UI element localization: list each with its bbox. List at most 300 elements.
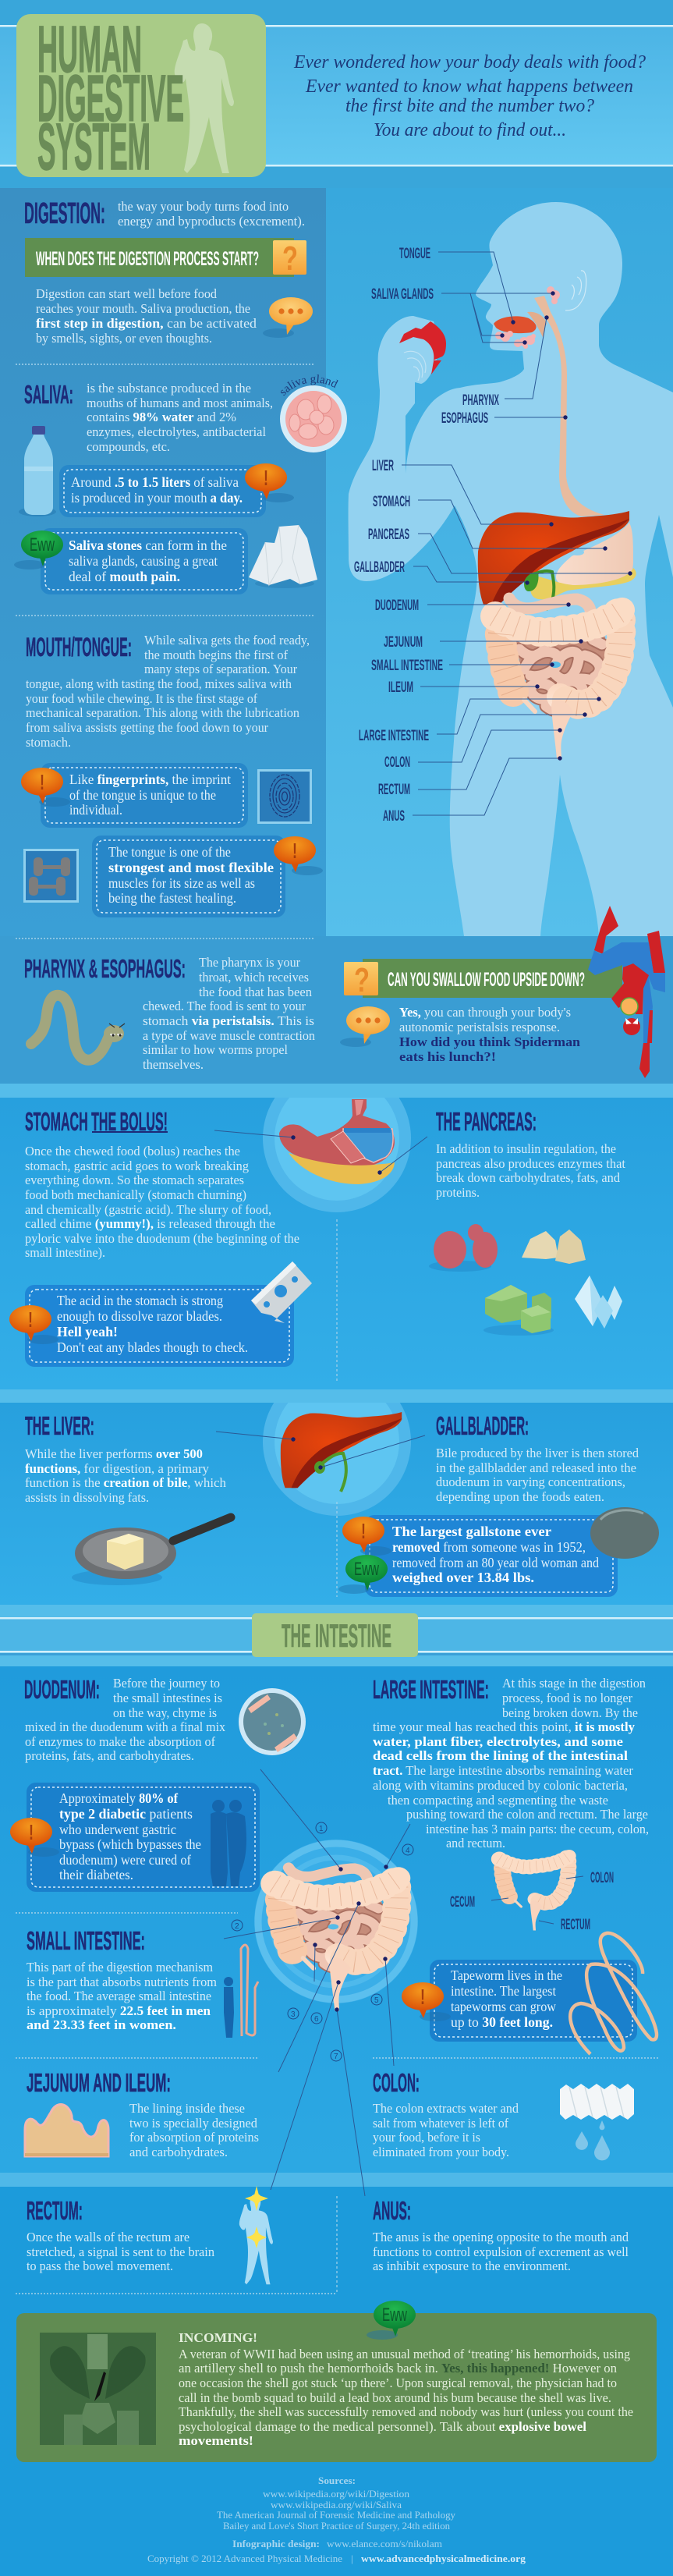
icon: saliva stone	[249, 525, 317, 588]
panel: gallbladder: GALLBLADDER:	[436, 1411, 529, 1440]
text block: incoming: A veteran of WWII had been using an unusual method of ‘treating’ his hemorrhoids, using	[179, 2347, 630, 2361]
callout: tongue strength	[92, 836, 323, 917]
callout: gastric bypass	[10, 1783, 260, 1892]
callout: saliva stones: Saliva stones can form in the	[69, 538, 227, 553]
icon: razor blade	[251, 1261, 312, 1323]
labels: ILEUM	[388, 679, 413, 696]
banner: the intestine	[0, 1613, 673, 1657]
text block: digestion start: by smells, sights, or even thoughts.	[36, 331, 212, 346]
icon: eww bubble: Eww	[354, 1559, 379, 1580]
icon: eww bubble	[14, 530, 63, 569]
text block: small intestine: is the part that absorbs nutrients from	[27, 1975, 217, 1989]
leader lines: liver	[216, 1432, 425, 1470]
icon: alert bubble	[21, 768, 70, 807]
number markers: 6	[314, 2015, 319, 2024]
panel: pancreas	[429, 1107, 625, 1336]
text block: swallow answer: How did you think Spiderman	[399, 1034, 581, 1049]
banner: when does digestion start: ?	[282, 240, 298, 278]
text block: large intestine: process, food is no longer	[502, 1691, 632, 1705]
icon: pelvis x-ray	[40, 2333, 156, 2445]
footer sources: Sources:	[318, 2475, 356, 2486]
text block: rectum: to pass the bowel movement.	[27, 2258, 173, 2273]
text block: stomach: pyloric valve into the duodenum (the beginning of the	[25, 1231, 299, 1246]
panel: intestine section: LARGE INTESTINE:	[373, 1675, 489, 1704]
callout: gallstone: removed from someone was in 1952,	[392, 1539, 586, 1555]
panel: intestine section	[10, 1675, 659, 2196]
text block: large intestine: then compacting and segmenting the waste	[388, 1793, 608, 1808]
icon: duodenum cross-section	[239, 1688, 306, 1755]
icon: alert bubble	[245, 463, 294, 502]
intro text: You are about to find out...	[374, 120, 566, 140]
icon: speech bubble	[340, 1006, 390, 1047]
callout: gallstone	[338, 1515, 618, 1597]
callout: tapeworm: Tapeworm lives in the	[451, 1967, 562, 1983]
text block: rectum: Once the walls of the rectum are	[27, 2230, 190, 2244]
icon: ice crystals	[575, 1276, 622, 1329]
icon: water bottle	[19, 426, 56, 516]
icon: alert bubble: !	[420, 1985, 425, 2009]
panel: intestine section: COLON:	[373, 2068, 420, 2097]
body silhouette	[349, 202, 673, 936]
organ: saliva glands	[495, 286, 560, 349]
icon: fat rocks	[522, 1229, 586, 1264]
callout: gastric bypass: their diabetes.	[59, 1867, 133, 1882]
text block: duodenum: of enzymes to make the absorption of	[25, 1734, 215, 1749]
callout: gastric bypass: who underwent gastric	[59, 1822, 176, 1837]
text block: pharynx	[143, 955, 315, 1072]
title block	[16, 12, 266, 183]
text block: pharynx: The pharynx is your	[199, 955, 300, 970]
text block: jejunum and ileum: for absorption of proteins	[129, 2130, 259, 2145]
text block: swallow answer	[399, 1005, 581, 1064]
footer sources: The American Journal of Forensic Medicine and Pathology	[217, 2509, 455, 2521]
labels: PANCREAS	[368, 527, 409, 543]
text block: liver: While the liver performs over 500	[25, 1446, 203, 1461]
organ: small intestine	[516, 634, 610, 713]
text block: liver	[25, 1446, 226, 1505]
footer sources: Copyright © 2012 Advanced Physical Medicine	[147, 2553, 342, 2564]
text block: incoming: INCOMING!	[179, 2330, 257, 2345]
text block: pancreas: pancreas also produces enzymes that	[436, 1156, 625, 1171]
panel: pancreas: THE PANCREAS:	[436, 1107, 537, 1136]
title block: DIGESTIVE	[37, 62, 184, 135]
panel: intestine section: SMALL INTESTINE:	[27, 1926, 145, 1955]
text block: stomach: small intestine).	[25, 1245, 105, 1260]
icon: saliva gland	[280, 374, 347, 452]
ring behind liver	[263, 1403, 411, 1516]
icon: speech bubble	[263, 297, 313, 338]
organ: gallbladder	[524, 571, 554, 610]
ring behind intestine	[254, 1840, 418, 2003]
labels: JEJUNUM	[384, 634, 423, 651]
text block: stomach: food both mechanically (stomach churning)	[25, 1187, 246, 1202]
labels: GALLBADDER	[354, 559, 405, 576]
text block: mouth	[26, 633, 310, 750]
text block: digestion start: Digestion can start well before food	[36, 286, 217, 301]
text block: anus: functions to control expulsion of excrement as well	[373, 2244, 629, 2259]
labels: COLON	[384, 754, 410, 771]
icon: eww bubble	[338, 1555, 388, 1594]
icon: alert bubble: !	[40, 770, 44, 794]
text block: digestion definition: energy and byproducts (excrement).	[118, 214, 305, 229]
callout: razor blades: Hell yeah!	[57, 1324, 118, 1339]
icon: protein blobs	[429, 1224, 498, 1272]
callout: tapeworm: up to 30 feet long.	[451, 2014, 553, 2030]
text block: colon: salt from whatever is left of	[373, 2116, 508, 2131]
text block: pharynx: throat, which receives	[199, 970, 309, 985]
callout: tapeworm	[402, 1960, 637, 2042]
text block: gallbladder	[436, 1446, 639, 1504]
organ: duodenum	[509, 598, 590, 610]
text block: pancreas	[436, 1141, 625, 1200]
number markers: 5	[374, 1996, 379, 2005]
banner: the intestine: THE INTESTINE	[282, 1617, 391, 1654]
text block: incoming: an artillery shell to push the hemorrhoids back in. Yes, this happened! However on	[179, 2361, 617, 2376]
text block: mouth: many steps of separation. Your	[144, 662, 297, 676]
number markers: 7	[334, 2053, 338, 2061]
icon: person beside intestine length	[224, 1945, 258, 2038]
icon: frying pan with butter	[72, 1517, 231, 1585]
callout: saliva quantity: is produced in your mouth a day.	[71, 490, 243, 506]
text block: saliva: contains 98% water and 2%	[87, 410, 236, 424]
labels: SMALL INTESTINE	[371, 658, 443, 674]
banner: when does digestion start: WHEN DOES THE DIGESTION PROCESS START?	[36, 248, 259, 270]
text block: large intestine: At this stage in the digestion	[502, 1676, 646, 1691]
text block: rectum: stretched, a signal is sent to the brain	[27, 2244, 214, 2259]
footer sources: www.advancedphysicalmedicine.org	[361, 2553, 526, 2564]
callout: gastric bypass: type 2 diabetic patients	[59, 1806, 193, 1822]
panel: intestine section: DUODENUM:	[24, 1675, 100, 1704]
text block: mouth: stomach.	[26, 735, 71, 750]
number markers: 4	[406, 1847, 410, 1855]
panel: mouth and tongue: MOUTH/TONGUE:	[26, 633, 132, 662]
icon: alert bubble: !	[292, 839, 297, 863]
callout: tongue strength: The tongue is one of the	[108, 844, 231, 860]
organ: stomach	[556, 523, 633, 587]
labels: LARGE INTESTINE	[359, 728, 429, 744]
text block: duodenum: on the way, chyme is	[113, 1705, 217, 1720]
text block: colon: The colon extracts water and	[373, 2101, 519, 2116]
text block: mouth: the mouth begins the first of	[144, 648, 288, 662]
labels: RECTUM	[378, 782, 410, 798]
icon: two people silhouettes	[211, 1800, 246, 1886]
text block: pharynx: themselves.	[143, 1057, 204, 1072]
text block: small intestine: is approximately 22.5 feet in men	[27, 2003, 211, 2018]
callout: fingerprints: of the tongue is unique to the	[69, 787, 216, 803]
text block: anus	[373, 2230, 629, 2273]
text block: stomach	[25, 1144, 299, 1260]
text block: jejunum and ileum: The lining inside these	[129, 2101, 245, 2116]
icon: large intestine parts: CECUM	[450, 1894, 475, 1911]
callout: razor blades: Don't eat any blades though to check.	[57, 1339, 248, 1355]
organ: liver	[478, 511, 629, 605]
text block: pharynx: chewed. The food is sent to your	[143, 999, 306, 1013]
panel: liver	[25, 1368, 425, 1585]
intro text	[293, 52, 646, 140]
text block: duodenum: proteins, fats, and carbohydrates.	[25, 1748, 194, 1763]
callout: saliva stones: deal of mouth pain.	[69, 569, 180, 584]
text block: colon	[373, 2101, 519, 2159]
text block: large intestine: and rectum.	[446, 1836, 505, 1850]
icon: liver illustration	[281, 1412, 402, 1492]
text block: digestion definition	[118, 199, 305, 229]
labels	[354, 246, 499, 825]
text block: mouth: from saliva assists getting the food down to your	[26, 720, 268, 735]
callout: gallstone: removed from an 80 year old woman and	[392, 1555, 599, 1570]
organ: tongue	[494, 316, 537, 333]
callout: tongue strength: strongest and most flexible	[108, 860, 274, 875]
icon: alert bubble	[10, 1818, 59, 1857]
text block: liver: function is the creation of bile, which	[25, 1475, 226, 1490]
text block: pancreas: In addition to insulin regulation, the	[436, 1141, 616, 1156]
number markers: 3	[291, 2010, 296, 2019]
labels: TONGUE	[399, 246, 430, 262]
text block: stomach: and chemically (gastric acid). The slurry of food,	[25, 1202, 271, 1217]
callout: gallstone: The largest gallstone ever	[392, 1524, 551, 1539]
icon: saliva gland: saliva gland	[281, 374, 338, 396]
banner: when does digestion start	[25, 238, 306, 278]
panel: incoming story	[16, 2301, 657, 2462]
panel: rectum: RECTUM:	[27, 2196, 83, 2225]
text block: mouth: your food while chewing. It is the first stage of	[26, 691, 257, 706]
banner: can you swallow upside down	[344, 959, 622, 999]
panel: digestion: DIGESTION:	[24, 197, 105, 230]
labels: STOMACH	[373, 494, 410, 510]
text block: digestion definition: the way your body turns food into	[118, 199, 289, 214]
panel: anus: ANUS:	[373, 2196, 411, 2225]
panel: left column background	[0, 188, 326, 936]
callout: fingerprints	[21, 763, 248, 828]
icon: central intestine	[275, 1868, 398, 2010]
text block: large intestine: tract. The large intestine absorbs remaining water	[373, 1763, 633, 1778]
callout: razor blades: The acid in the stomach is strong	[57, 1293, 223, 1308]
text block: duodenum: the small intestines is	[113, 1691, 222, 1705]
text block: mouth: mechanical separation. This along with the lubrication	[26, 705, 299, 720]
text block: large intestine: along with vitamins produced by colonic bacteria,	[373, 1778, 628, 1793]
text block: large intestine: intestine has 3 main parts: the cecum, colon,	[426, 1822, 649, 1836]
icon: alert bubble	[342, 1517, 391, 1556]
callout: tapeworm: intestine. The largest	[451, 1983, 556, 1999]
panel: gallbladder	[338, 1411, 659, 1597]
text block: swallow answer: autonomic peristalsis response.	[399, 1020, 560, 1034]
number markers: 1	[319, 1825, 324, 1833]
panel: liver: THE LIVER:	[25, 1411, 94, 1440]
text block: gallbladder: depending upon the foods eaten.	[436, 1489, 604, 1504]
callout: gastric bypass: Approximately 80% of	[59, 1790, 179, 1806]
leader lines: intestine	[224, 1769, 410, 2196]
text block: incoming: psychological damage to the medical personnel). Talk about explosive bowel	[179, 2419, 586, 2434]
footer sources: www.wikipedia.org/wiki/Digestion	[263, 2488, 410, 2500]
icon: alert bubble: !	[264, 466, 268, 490]
text block: pharynx: a type of wave muscle contraction	[143, 1028, 315, 1043]
callout: razor blades	[9, 1285, 294, 1367]
footer sources: www.elance.com/s/nikolam	[327, 2538, 442, 2549]
icon: eww bubble: Eww	[30, 534, 55, 555]
panel: pharynx and esophagus: PHARYNX & ESOPHAGUS:	[24, 954, 186, 983]
text block: stomach: stomach, gastric acid goes to work breaking	[25, 1158, 249, 1173]
apple	[399, 321, 446, 374]
panel: stomach: STOMACH THE BOLUS!	[25, 1107, 168, 1136]
panel: mouth and tongue	[21, 633, 323, 917]
icon: man silhouette	[175, 23, 234, 173]
text block: jejunum and ileum: and carbohydrates.	[129, 2145, 228, 2159]
text block: colon: eliminated from your body.	[373, 2145, 509, 2159]
text block: rectum	[27, 2230, 214, 2273]
title text	[37, 12, 184, 183]
icon: eww bubble	[367, 2301, 416, 2340]
footer sources	[147, 2475, 526, 2564]
icon: stomach illustration	[279, 1099, 395, 1184]
callout: saliva stones: saliva glands, causing a great	[69, 553, 218, 569]
intro text: Ever wanted to know what happens between	[305, 76, 633, 97]
callout: razor blades: enough to dissolve razor blades.	[57, 1308, 222, 1324]
text block: saliva: mouths of humans and most animals,	[87, 396, 273, 410]
icon: man with signal stars	[239, 2186, 273, 2284]
text block: duodenum: mixed in the duodenum with a final mix	[25, 1719, 225, 1734]
text block: liver: functions, for digestion, a primary	[25, 1461, 209, 1476]
text block: incoming	[179, 2330, 633, 2448]
intro text: the first bite and the number two?	[345, 96, 594, 116]
text block: large intestine: dead cells from the lining of the intestinal	[373, 1748, 628, 1763]
text block: gallbladder: in the gallbladder and released into the	[436, 1460, 636, 1475]
icon: tapeworm	[570, 1933, 657, 2054]
callout: saliva quantity	[59, 463, 294, 517]
text block: small intestine	[27, 1960, 217, 2032]
icon: worm	[31, 995, 125, 1060]
text block: small intestine: the food. The average small intestine	[27, 1989, 211, 2003]
panel: digestion	[24, 197, 313, 346]
text block: small intestine: This part of the digestion mechanism	[27, 1960, 213, 1975]
text block: saliva: compounds, etc.	[87, 439, 170, 454]
text block: incoming: Thankfully, the shell was successfully removed and nobody was hurt (unless you count the	[179, 2404, 633, 2419]
leader lines: stomach	[214, 1130, 427, 1175]
organ: pancreas	[530, 568, 636, 599]
callout: tongue strength: being the fastest healing.	[108, 890, 236, 906]
text block: mouth: tongue, along with tasting the food, mixes saliva with	[26, 676, 292, 691]
icon: green cubes	[483, 1285, 554, 1336]
icon: gallstone	[590, 1507, 659, 1559]
text block: saliva	[87, 381, 273, 454]
footer sources: www.wikipedia.org/wiki/Saliva	[271, 2499, 402, 2510]
footer sources: |	[351, 2553, 353, 2564]
text block: large intestine: being broken down. By the	[502, 1705, 638, 1720]
labels: LIVER	[372, 458, 394, 474]
icon: dumbbells	[25, 850, 78, 902]
text block: saliva: is the substance produced in the	[87, 381, 251, 396]
icon: alert bubble: !	[29, 1820, 34, 1844]
panel: stomach	[9, 1098, 427, 1367]
icon: alert bubble	[402, 1982, 451, 2021]
leader lines	[402, 252, 632, 815]
text block: duodenum: Before the journey to	[113, 1676, 220, 1691]
text block: pharynx: the food that has been	[199, 985, 312, 999]
text block: pancreas: proteins.	[436, 1185, 480, 1200]
organ: pharynx and esophagus	[534, 296, 604, 516]
text block: stomach: everything down. So the stomach separates	[25, 1173, 244, 1187]
text block: mouth: While saliva gets the food ready,	[144, 633, 310, 648]
text block: digestion start	[36, 286, 257, 346]
callout: tapeworm: tapeworms can grow	[451, 1999, 556, 2014]
callout: fingerprints: Like fingerprints, the imprint	[69, 772, 231, 787]
icon: alert bubble: !	[361, 1519, 366, 1543]
labels: DUODENUM	[375, 598, 419, 614]
labels: PHARYNX	[462, 392, 499, 409]
heading: jejunum and ileum: JEJUNUM AND ILEUM:	[27, 2068, 171, 2097]
intro text: Ever wondered how your body deals with food?	[293, 52, 646, 73]
text block: gallbladder: Bile produced by the liver is then stored	[436, 1446, 639, 1460]
text block: liver: assists in dissolving fats.	[25, 1490, 149, 1505]
text block: swallow answer: eats his lunch?!	[399, 1049, 496, 1064]
panel: pharynx and esophagus	[0, 906, 673, 1084]
text block: large intestine: time your meal has reached this point, it is mostly	[373, 1719, 635, 1734]
text block: incoming: one occasion the shell got stuck ‘up there’. Upon surgical removal, the physician had to	[179, 2376, 617, 2390]
panel: intestine section: COLON	[590, 1870, 614, 1886]
organ: large intestine	[495, 610, 622, 759]
body diagram	[349, 202, 673, 936]
text block: small intestine: and 23.33 feet in women.	[27, 2017, 176, 2032]
panel: anus	[373, 2196, 629, 2273]
text block: anus: The anus is the opening opposite to the mouth and	[373, 2230, 629, 2244]
text block: duodenum	[25, 1676, 225, 1763]
text block: digestion start: first step in digestion, can be activated	[36, 316, 257, 331]
text block: gallbladder: duodenum in varying concentrations,	[436, 1474, 625, 1489]
callout: saliva stones	[14, 528, 248, 594]
banner: can you swallow upside down: ?	[354, 961, 370, 999]
number markers	[232, 1822, 413, 2061]
title text: SYSTEM	[37, 110, 151, 183]
text block: jejunum and ileum: two is specially designed	[129, 2116, 257, 2131]
text block: incoming: call in the bomb squad to build a lead box around his bum because the shell was live.	[179, 2390, 611, 2405]
text block: stomach: Once the chewed food (bolus) reaches the	[25, 1144, 240, 1158]
ring behind stomach	[263, 1098, 411, 1212]
callout: gastric bypass: bypass (which bypasses the	[59, 1836, 201, 1853]
labels: ANUS	[383, 808, 405, 825]
header band	[0, 25, 673, 167]
footer sources: Bailey and Love's Short Practice of Surgery, 24th edition	[223, 2520, 450, 2532]
icon: alert bubble	[9, 1305, 58, 1344]
text block: large intestine: pushing toward the colon and rectum. The large	[406, 1807, 648, 1822]
panel: rectum	[27, 2186, 273, 2284]
text block: jejunum and ileum	[129, 2101, 259, 2159]
text block: large intestine: water, plant fiber, electrolytes, and some	[373, 1734, 623, 1749]
title text: HUMAN	[37, 12, 142, 86]
callout: gastric bypass: duodenum) were cured of	[59, 1852, 191, 1868]
panel: saliva: SALIVA:	[24, 380, 73, 409]
icon: wrung towel and drops	[560, 2084, 634, 2160]
labels: SALIVA GLANDS	[371, 286, 434, 303]
icon: large intestine parts	[450, 1856, 614, 1933]
text block: stomach: called chime (yummy!), is released through the	[25, 1216, 275, 1231]
icon: spiderman	[588, 906, 665, 1078]
text block: pharynx: similar to how worms propel	[143, 1042, 288, 1057]
text block: swallow answer: Yes, you can through your body's	[399, 1005, 571, 1020]
text block: saliva: enzymes, electrolytes, antibacterial	[87, 424, 266, 439]
footer sources: Infographic design:	[232, 2538, 320, 2549]
callout: gallstone: weighed over 13.84 lbs.	[392, 1570, 534, 1585]
icon: fingerprint	[259, 771, 310, 822]
icon: eww bubble: Eww	[382, 2305, 407, 2326]
text block: large intestine	[373, 1676, 649, 1850]
icon: villi	[25, 2104, 108, 2156]
icon: large intestine parts: RECTUM	[561, 1917, 590, 1933]
text block: pharynx: stomach via peristalsis. This is	[143, 1013, 314, 1028]
text block: anus: as inhibit exposure to the environment.	[373, 2258, 571, 2273]
callout: saliva quantity: Around .5 to 1.5 liters of saliva	[71, 474, 239, 490]
labels: ESOPHAGUS	[441, 410, 488, 427]
panel: saliva	[14, 374, 347, 594]
text block: pancreas: break down carbohydrates, fats, and	[436, 1170, 620, 1185]
icon: alert bubble: !	[28, 1308, 33, 1332]
